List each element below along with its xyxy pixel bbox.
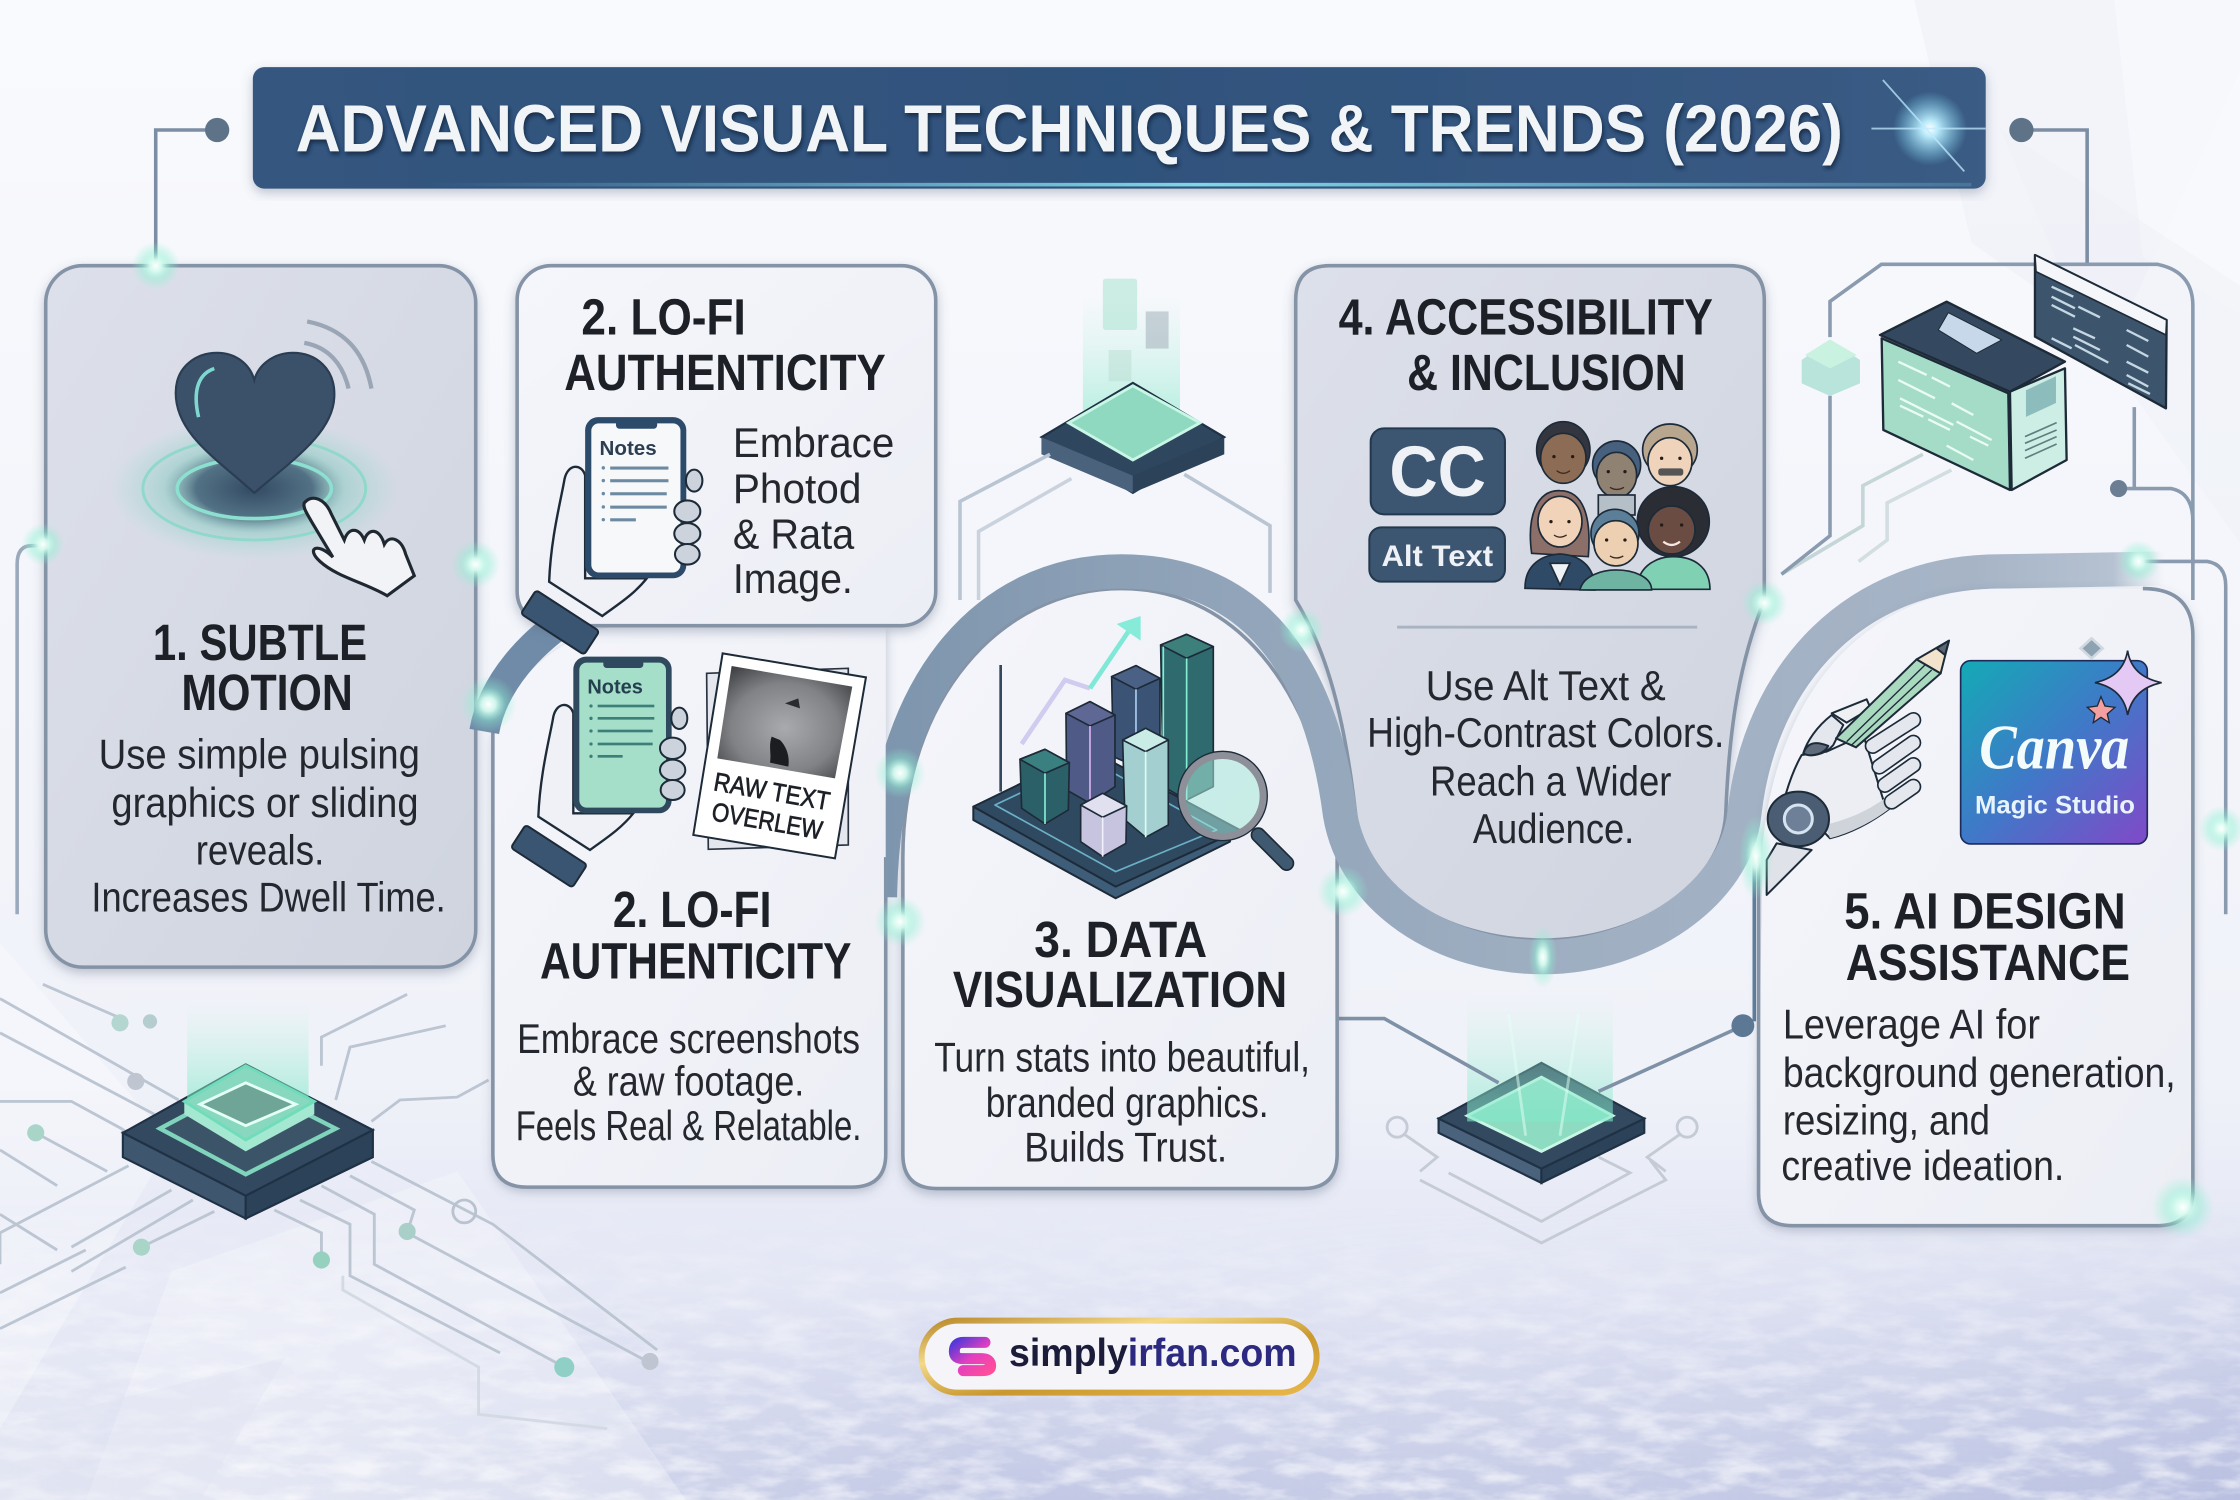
body text [1781, 1002, 2176, 1189]
icon: cube [1802, 339, 1860, 396]
title text: ADVANCED VISUAL TECHNIQUES & TRENDS (2026) [296, 91, 1843, 166]
heading: 4. ACCESSIBILITY [1339, 287, 1713, 345]
background [0, 1126, 2240, 1500]
body text: resizing, and [1783, 1097, 1990, 1143]
body text: Embrace [733, 420, 894, 466]
body text: Feels Real & Relatable. [516, 1103, 861, 1149]
title sparkle [1871, 80, 1986, 171]
icon: CC and alt text badges [1369, 428, 1505, 582]
body text: Image. [733, 556, 853, 602]
heading: 2. LO-FI [613, 880, 771, 938]
body text: & raw footage. [573, 1059, 804, 1105]
panel: 1 subtle motion [46, 266, 476, 967]
body text: Photod [733, 466, 861, 512]
panel: 4 accessibility and inclusion [1296, 266, 1764, 940]
panel: 2 lo-fi authenticity lower [493, 626, 886, 1187]
icon: pulsing heart with pointer [109, 321, 414, 596]
icon: canva magic studio tile [1961, 638, 2162, 844]
heading: AUTHENTICITY [564, 343, 886, 401]
body text [1367, 663, 1724, 852]
connectors: side and centre traces [17, 407, 2226, 1091]
ribbon: short left arc [484, 611, 579, 731]
body text: branded graphics. [986, 1080, 1269, 1126]
heading: 1. SUBTLE [153, 613, 367, 671]
body text: Use simple pulsing [99, 732, 420, 778]
connector: title to panel 1 [156, 118, 229, 266]
icon: phone in hand: Notes [600, 437, 657, 460]
heading: MOTION [181, 663, 353, 721]
icon: canva magic studio tile: Canva [1979, 712, 2129, 782]
body text: Use Alt Text & [1426, 663, 1666, 709]
icon: canva magic studio tile: Magic Studio [1975, 791, 2135, 819]
body text: High-Contrast Colors. [1367, 710, 1724, 756]
body text: Reach a Wider [1430, 759, 1672, 805]
body text: Embrace screenshots [517, 1016, 860, 1062]
body text: Increases Dwell Time. [91, 874, 446, 920]
body text: & Rata [733, 512, 855, 558]
icon: robot hand with pencil [1767, 641, 1949, 895]
heading: AUTHENTICITY [540, 932, 851, 990]
icon: polaroid photo: RAW TEXT [712, 766, 832, 816]
body text: Leverage AI for [1783, 1002, 2040, 1048]
panel: 5 ai design assistance [1757, 589, 2193, 1226]
circuit traces: lower left [0, 984, 659, 1429]
heading [1339, 287, 1713, 401]
icon: phone in hand with notes [511, 657, 687, 888]
body text: Builds Trust. [1024, 1124, 1227, 1170]
chip: top centre [1041, 279, 1224, 493]
icon: server device [1880, 302, 2067, 490]
body text [934, 1034, 1310, 1170]
body text: reveals. [196, 827, 324, 873]
body text [91, 732, 446, 920]
panel: 2 lo-fi authenticity upper [517, 266, 936, 655]
heading [953, 910, 1287, 1018]
heading [540, 880, 851, 990]
glow nodes [21, 241, 2240, 1239]
chip: lower left [123, 999, 373, 1219]
panel: 3 data visualization [903, 589, 1337, 1189]
body text: creative ideation. [1781, 1143, 2064, 1189]
heading [153, 613, 367, 721]
heading: & INCLUSION [1407, 343, 1686, 401]
icon: diverse group of people [1525, 422, 1710, 590]
heading: VISUALIZATION [953, 960, 1287, 1018]
chart: isometric bars with magnifier [973, 616, 1287, 898]
icon: phone in hand [521, 417, 702, 655]
heading: 3. DATA [1034, 910, 1207, 968]
heading: 2. LO-FI [581, 287, 746, 345]
icon: browser window [2035, 255, 2167, 408]
body text: Turn stats into beautiful, [934, 1034, 1310, 1080]
title banner [253, 67, 1986, 189]
body text [733, 420, 894, 602]
body text [516, 1016, 861, 1149]
ribbon: flowing s-curve [880, 569, 2164, 957]
icon: polaroid photo [693, 653, 866, 858]
icon: CC and alt text badges: Alt Text [1381, 540, 1493, 573]
chip: bottom centre [1387, 993, 1697, 1243]
connector: title to server [2009, 118, 2087, 266]
logo mark [954, 1342, 991, 1371]
icon: phone in hand with notes: Notes [587, 676, 643, 698]
footer badge: simplyirfan.com [922, 1321, 1317, 1393]
website text: simplyirfan.com [1009, 1331, 1297, 1375]
heading [564, 287, 886, 401]
heading: 5. AI DESIGN [1844, 882, 2126, 940]
heading: ASSISTANCE [1846, 933, 2130, 991]
icon: CC and alt text badges: CC [1389, 432, 1486, 512]
body text: graphics or sliding [111, 780, 419, 826]
icon: polaroid photo: OVERLEW [710, 796, 825, 845]
panel: server illustration [1781, 255, 2193, 574]
heading [1844, 882, 2130, 991]
body text: background generation, [1783, 1050, 2176, 1096]
body text: Audience. [1473, 806, 1634, 852]
